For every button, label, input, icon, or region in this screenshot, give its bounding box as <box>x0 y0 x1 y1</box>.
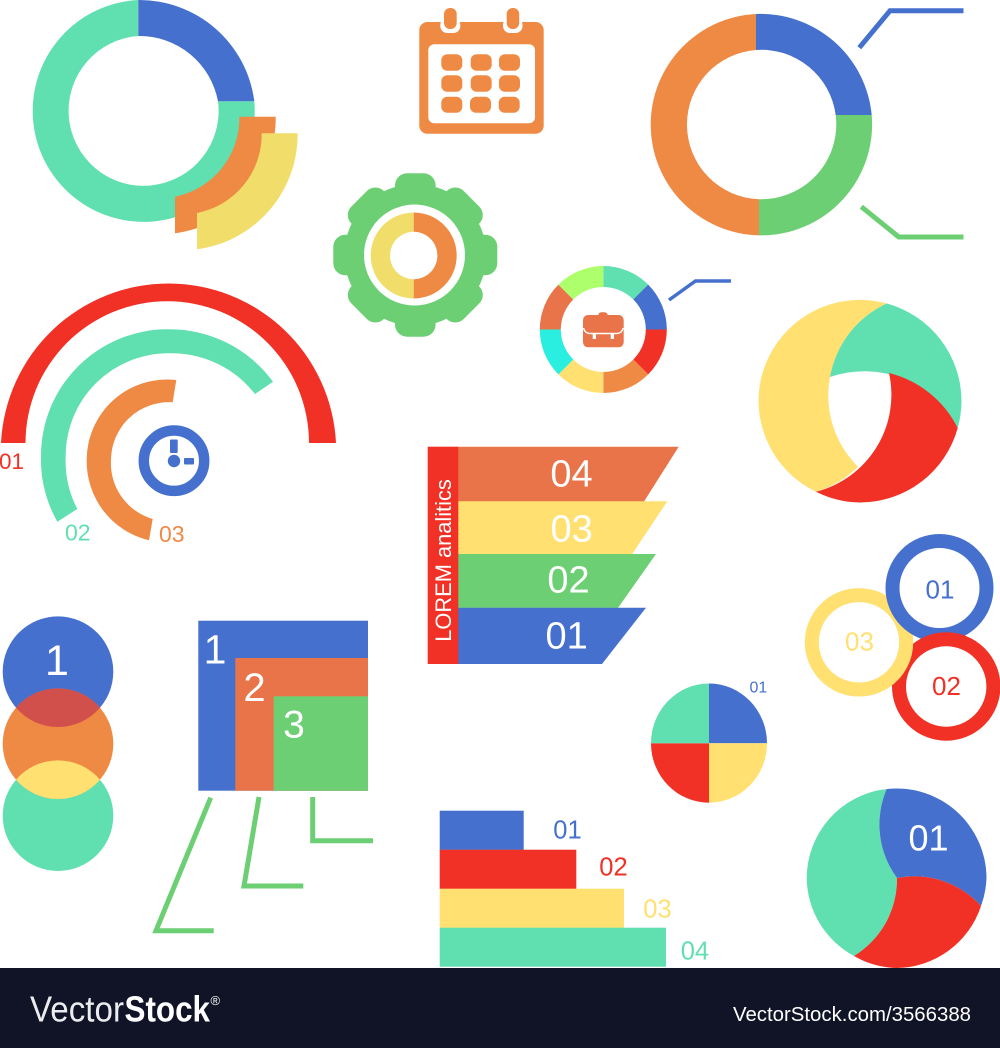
arc: red 01 <box>1 283 336 443</box>
logo: VectorStock <box>30 988 220 1030</box>
icon: calendar <box>419 8 544 134</box>
label: 01: 01 <box>908 818 949 858</box>
logo: VectorStock: Stock <box>124 988 211 1030</box>
ring label 02: 02 <box>932 671 961 701</box>
label: 02: 02 <box>65 520 91 546</box>
leader line: blue small donut <box>669 281 731 300</box>
square label 2: 2 <box>243 666 266 710</box>
ribbon label 03: 03 <box>551 509 593 551</box>
label: 01: 01 <box>750 679 767 696</box>
label: 1: 1 <box>45 637 69 685</box>
icon: clock <box>144 430 204 491</box>
footer bar <box>0 968 1000 1048</box>
ribbon label 02: 02 <box>547 560 590 602</box>
bar chart: stepped bars <box>440 811 709 967</box>
rings: overlapping 01 02 03 <box>812 541 993 734</box>
bar label 04: 04 <box>681 937 709 965</box>
ribbon label 01: 01 <box>546 615 588 657</box>
venn: three stacked circles <box>3 616 113 871</box>
donut chart: eight segments with briefcase <box>540 266 667 393</box>
square label 1: 1 <box>204 626 226 672</box>
icon: gear with donut <box>333 173 497 337</box>
nested squares chart <box>198 621 368 791</box>
ring label 03: 03 <box>845 627 874 657</box>
logo: VectorStock: Vector <box>30 988 124 1030</box>
donut chart: top right three segments <box>651 14 872 235</box>
square label 3: 3 <box>283 704 305 747</box>
sidebar label: LOREM analitics <box>431 479 456 642</box>
arc: mint 02 <box>41 329 273 522</box>
leader line: blue top right <box>859 11 964 48</box>
gauge: concentric arcs with clock <box>0 283 336 547</box>
bar label 01: 01 <box>553 816 582 844</box>
arc: orange 03 <box>87 379 176 540</box>
ring label 01: 01 <box>926 574 954 604</box>
leader line: square 1 <box>156 798 214 931</box>
donut chart: top left with offset arcs <box>33 0 298 249</box>
logo: VectorStock: ® <box>210 993 220 1008</box>
leader line: square 2 <box>244 797 303 886</box>
ribbon label 04: 04 <box>550 454 593 496</box>
bar label 02: 02 <box>599 853 628 881</box>
bar label 03: 03 <box>643 895 672 923</box>
pie: four quadrants <box>651 679 767 803</box>
pie: three curved segments with 01 <box>807 788 986 968</box>
leader line: square 3 <box>313 797 373 841</box>
url text: VectorStock.com/3566388 <box>733 1004 971 1026</box>
ribbon chart: LOREM analitics <box>428 447 679 664</box>
leader line: green top right <box>861 207 964 237</box>
label: 03: 03 <box>159 521 185 547</box>
icon: briefcase <box>583 312 624 347</box>
pie: three swirl segments with white centre <box>758 300 962 502</box>
